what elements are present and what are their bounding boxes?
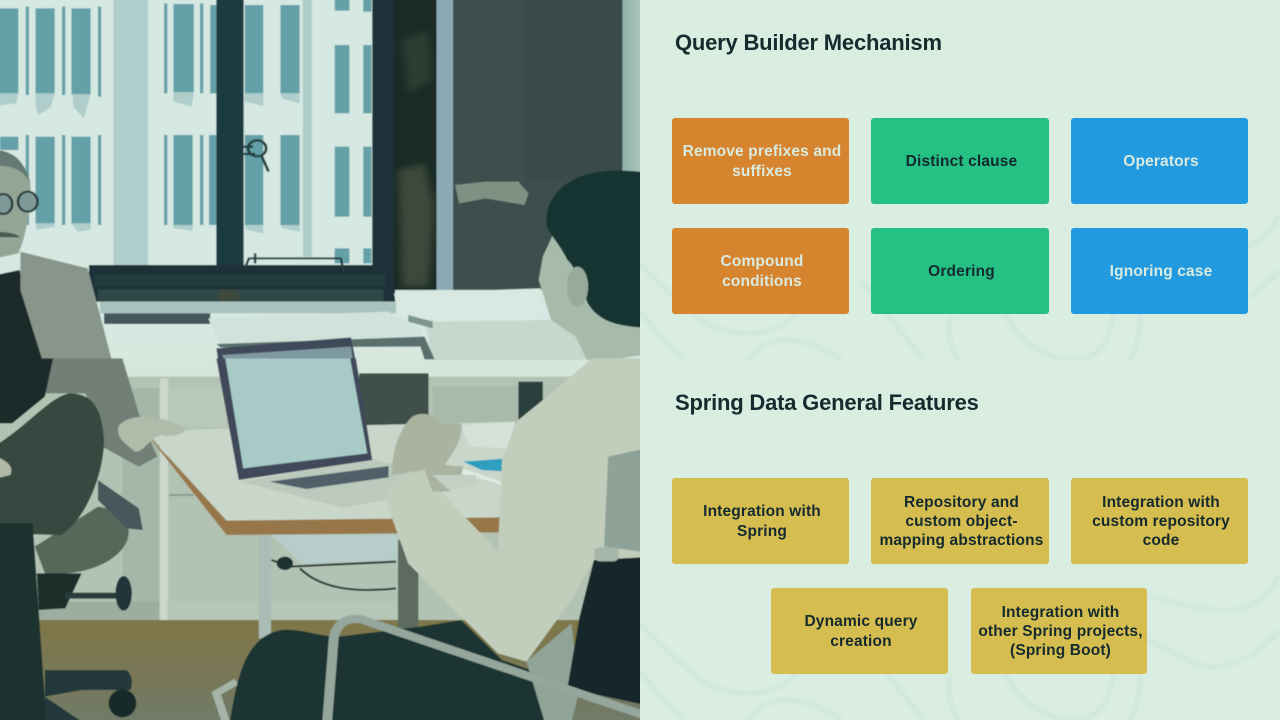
card: Integration with custom repository code: Integration with [1102, 494, 1220, 511]
heading: Spring Data General Features: Spring Data General Features [675, 390, 979, 415]
scene: complete photo artwork [0, 0, 653, 720]
card: Operators: Operators [1123, 153, 1199, 170]
background pattern [640, 0, 1280, 720]
scene: lower room, table, laptop and people [0, 358, 653, 720]
laptop [216, 358, 478, 507]
card: Integration with Spring [672, 478, 849, 564]
desk chair behind table [216, 535, 418, 720]
card: Dynamic query creation: Dynamic query [804, 613, 918, 630]
card: Integration with custom repository code: code [1143, 532, 1179, 549]
card: Compound conditions: Compound [720, 253, 803, 270]
table [147, 422, 514, 535]
card: Operators [1071, 118, 1248, 204]
card: Remove prefixes and suffixes: Remove prefixes and [683, 143, 841, 160]
man on the right: head and hair [539, 171, 653, 362]
window latches [241, 140, 344, 272]
card: Integration with other Spring projects (Spring Boot): Integration with [1002, 604, 1119, 621]
card: Integration with other Spring projects (Spring Boot): other Spring projects, [978, 623, 1143, 640]
card: Remove prefixes and suffixes [672, 118, 849, 204]
card: Distinct clause [871, 118, 1049, 204]
card: Ordering: Ordering [928, 263, 995, 280]
card: Ignoring case [1071, 228, 1248, 314]
papers on table [457, 422, 515, 486]
card: Integration with other Spring projects (Spring Boot) [971, 588, 1147, 674]
heading: Query Builder Mechanism: Query Builder Mechanism [675, 30, 942, 55]
card: Integration with custom repository code [1071, 478, 1248, 564]
sill and stacks of paper [100, 288, 602, 362]
card: Repository and custom object-mapping abstractions [871, 478, 1049, 564]
cabinets and floor [0, 360, 653, 720]
laptop lid top [216, 337, 356, 362]
card: Distinct clause: Distinct clause [906, 153, 1017, 170]
right man: sweater, hand, legs, chair [229, 358, 653, 720]
card: Integration with Spring: Integration with [703, 503, 821, 520]
card: Integration with other Spring projects (Spring Boot): (Spring Boot) [1010, 642, 1111, 659]
left man: legs, hand, chair [0, 358, 186, 720]
card: Integration with Spring: Spring [737, 523, 787, 540]
man on the left [0, 150, 112, 362]
photo: two people meeting at a table with a laptop [0, 0, 640, 720]
wall: marble column, strip and dark panel [394, 0, 653, 290]
card: Repository and custom object-mapping abstractions: mapping abstractions [879, 532, 1044, 549]
card: Dynamic query creation [771, 588, 948, 674]
card: Repository and custom object-mapping abstractions: Repository and [904, 494, 1019, 511]
card: Compound conditions [672, 228, 849, 314]
scene: window and upper room [0, 0, 653, 362]
card: Repository and custom object-mapping abstractions: custom object- [905, 513, 1018, 530]
window frame [89, 0, 395, 302]
card: Dynamic query creation: creation [830, 633, 892, 650]
card: Ignoring case: Ignoring case [1110, 263, 1212, 280]
card: Compound conditions: conditions [722, 273, 802, 290]
card: Integration with custom repository code: custom repository [1092, 513, 1230, 530]
card: Remove prefixes and suffixes: suffixes [732, 163, 792, 180]
card: Ordering [871, 228, 1049, 314]
